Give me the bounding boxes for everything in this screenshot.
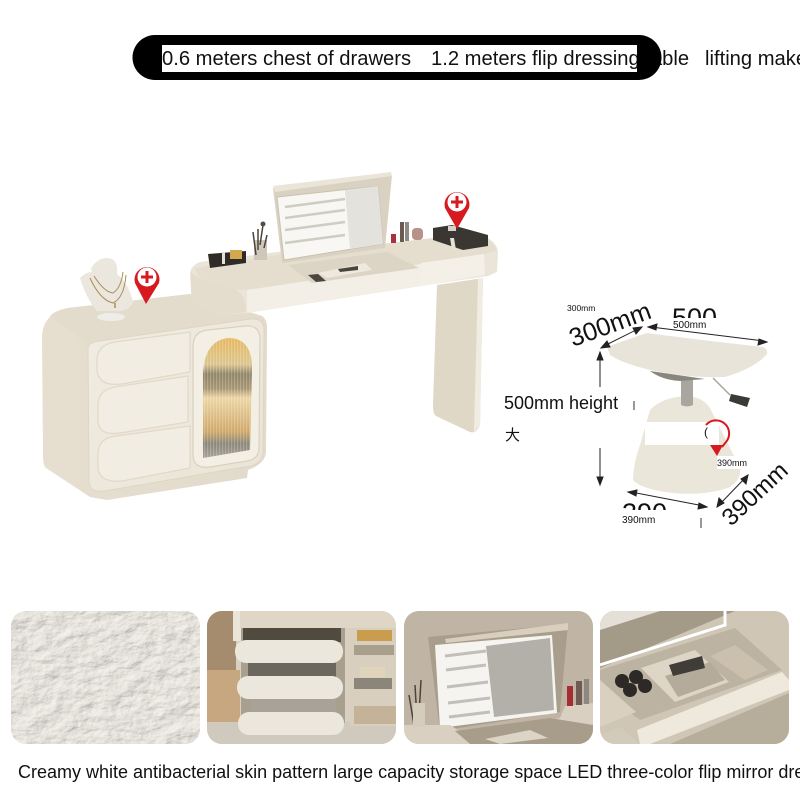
- mirror light strips: [285, 199, 345, 243]
- mirror top bar: [445, 623, 568, 643]
- mirror top bar: [273, 172, 392, 192]
- small label 390mm bottom: 390mm: [622, 515, 655, 526]
- glass cabinet interior: [354, 630, 396, 724]
- jewelry box: [433, 225, 488, 250]
- leg highlight: [474, 278, 483, 432]
- tray contents: [308, 266, 358, 282]
- bottles: [567, 679, 589, 706]
- mask over 300mm: [625, 315, 670, 350]
- glass door frame: [193, 326, 260, 467]
- right drawer panel: [421, 254, 485, 286]
- title text: 0.6 meters chest of drawers: [162, 48, 411, 70]
- white mask band: [645, 422, 719, 445]
- mask under 500: [668, 318, 725, 328]
- left organizer: [208, 250, 246, 268]
- mirror frame: [273, 175, 392, 263]
- photo: leather texture: [11, 611, 200, 744]
- mirror back frame: [428, 624, 568, 731]
- mirror glass: [435, 635, 557, 728]
- tray dividers: [318, 263, 372, 278]
- open tray: [288, 252, 419, 283]
- cream boxes: [710, 645, 768, 680]
- drawer 3: [98, 426, 190, 481]
- drawer cavity: [241, 628, 345, 723]
- left front rounded end: [191, 272, 246, 315]
- base depth arrow: [717, 475, 748, 507]
- stool base: [633, 396, 740, 494]
- label mask: [717, 456, 749, 469]
- stray tick: [700, 518, 702, 528]
- tray: [455, 718, 593, 744]
- height arrow: [597, 352, 603, 485]
- small label 300mm: 300mm: [567, 303, 595, 313]
- drawer front: [247, 264, 421, 313]
- cabinet top band: [240, 611, 396, 628]
- amber glass panel: [203, 338, 252, 458]
- reflection: [486, 638, 554, 717]
- gas lift post: [681, 378, 693, 406]
- compact cases: [669, 656, 705, 676]
- cabinet body: [42, 294, 267, 500]
- small label 390mm right: 390mm: [717, 458, 747, 468]
- mirror edge light: [600, 611, 725, 665]
- photo: tray close-up: [600, 611, 789, 744]
- large clipped 390: 390: [622, 498, 667, 528]
- drawer interiors: [243, 628, 341, 677]
- title bar: [132, 35, 800, 80]
- cabinet top surface: [50, 294, 262, 344]
- mask residue: (: [704, 425, 708, 439]
- pin: table hotspot: [444, 192, 469, 229]
- lift lever: [713, 378, 750, 407]
- brushes: [409, 680, 421, 725]
- stool seat: [607, 333, 767, 377]
- small label 500mm: 500mm: [673, 320, 706, 331]
- necklace bust: [80, 258, 133, 321]
- table leg: [433, 278, 483, 432]
- drawer lower face: [670, 693, 789, 744]
- photo: LED mirror: [404, 611, 593, 744]
- mask under 390: [618, 510, 674, 530]
- mirror reflection: [345, 186, 383, 249]
- plus sign: [451, 196, 463, 208]
- lower drawer contents: [601, 734, 614, 744]
- height label: 500mm height: [504, 393, 618, 413]
- cabinet front: [88, 319, 264, 491]
- seat mechanism: [650, 371, 705, 381]
- drawer fronts: [235, 640, 344, 735]
- tabletop surface: [195, 233, 497, 290]
- photo: drawers open: [207, 611, 396, 744]
- cosmetics: [391, 222, 423, 243]
- light strips: [445, 651, 490, 717]
- base width arrow: [628, 490, 707, 509]
- stray tick: [633, 401, 635, 410]
- drawer 2: [98, 376, 188, 433]
- lifting stool diagram: [504, 297, 794, 531]
- large rotated 390mm: 390mm: [717, 457, 794, 531]
- black pill frame: [132, 35, 662, 80]
- tray bottom: [600, 628, 782, 720]
- rug: [207, 722, 396, 744]
- red pin outline: [706, 420, 729, 456]
- tray inner box: [641, 650, 729, 702]
- CJK label: 大: [505, 427, 520, 444]
- title text: 1.2 meters flip dressing table: [431, 48, 689, 70]
- width arrow: [648, 324, 767, 345]
- product: chest of drawers: [42, 294, 267, 500]
- large rotated 300mm: 300mm: [565, 297, 655, 353]
- mirror bottom reflection: [600, 611, 660, 630]
- table top: [404, 703, 593, 744]
- cabinet frame post: [233, 611, 241, 641]
- left flap: [600, 680, 636, 727]
- wall and floor: [207, 611, 236, 670]
- mirror glass: [277, 186, 383, 260]
- depth arrow: [601, 327, 642, 348]
- brush pot: [413, 703, 425, 727]
- drawer front: [637, 672, 789, 744]
- plus sign: [141, 271, 153, 283]
- product: flip dressing table: [190, 172, 498, 432]
- pin: chest hotspot: [134, 267, 160, 304]
- perfume tins: [615, 670, 652, 697]
- upper mirror area: [600, 611, 735, 668]
- tabletop body: [190, 233, 498, 315]
- brush pot: [253, 222, 267, 260]
- drawer 1: [97, 332, 190, 384]
- large clipped 500: 500: [672, 303, 717, 333]
